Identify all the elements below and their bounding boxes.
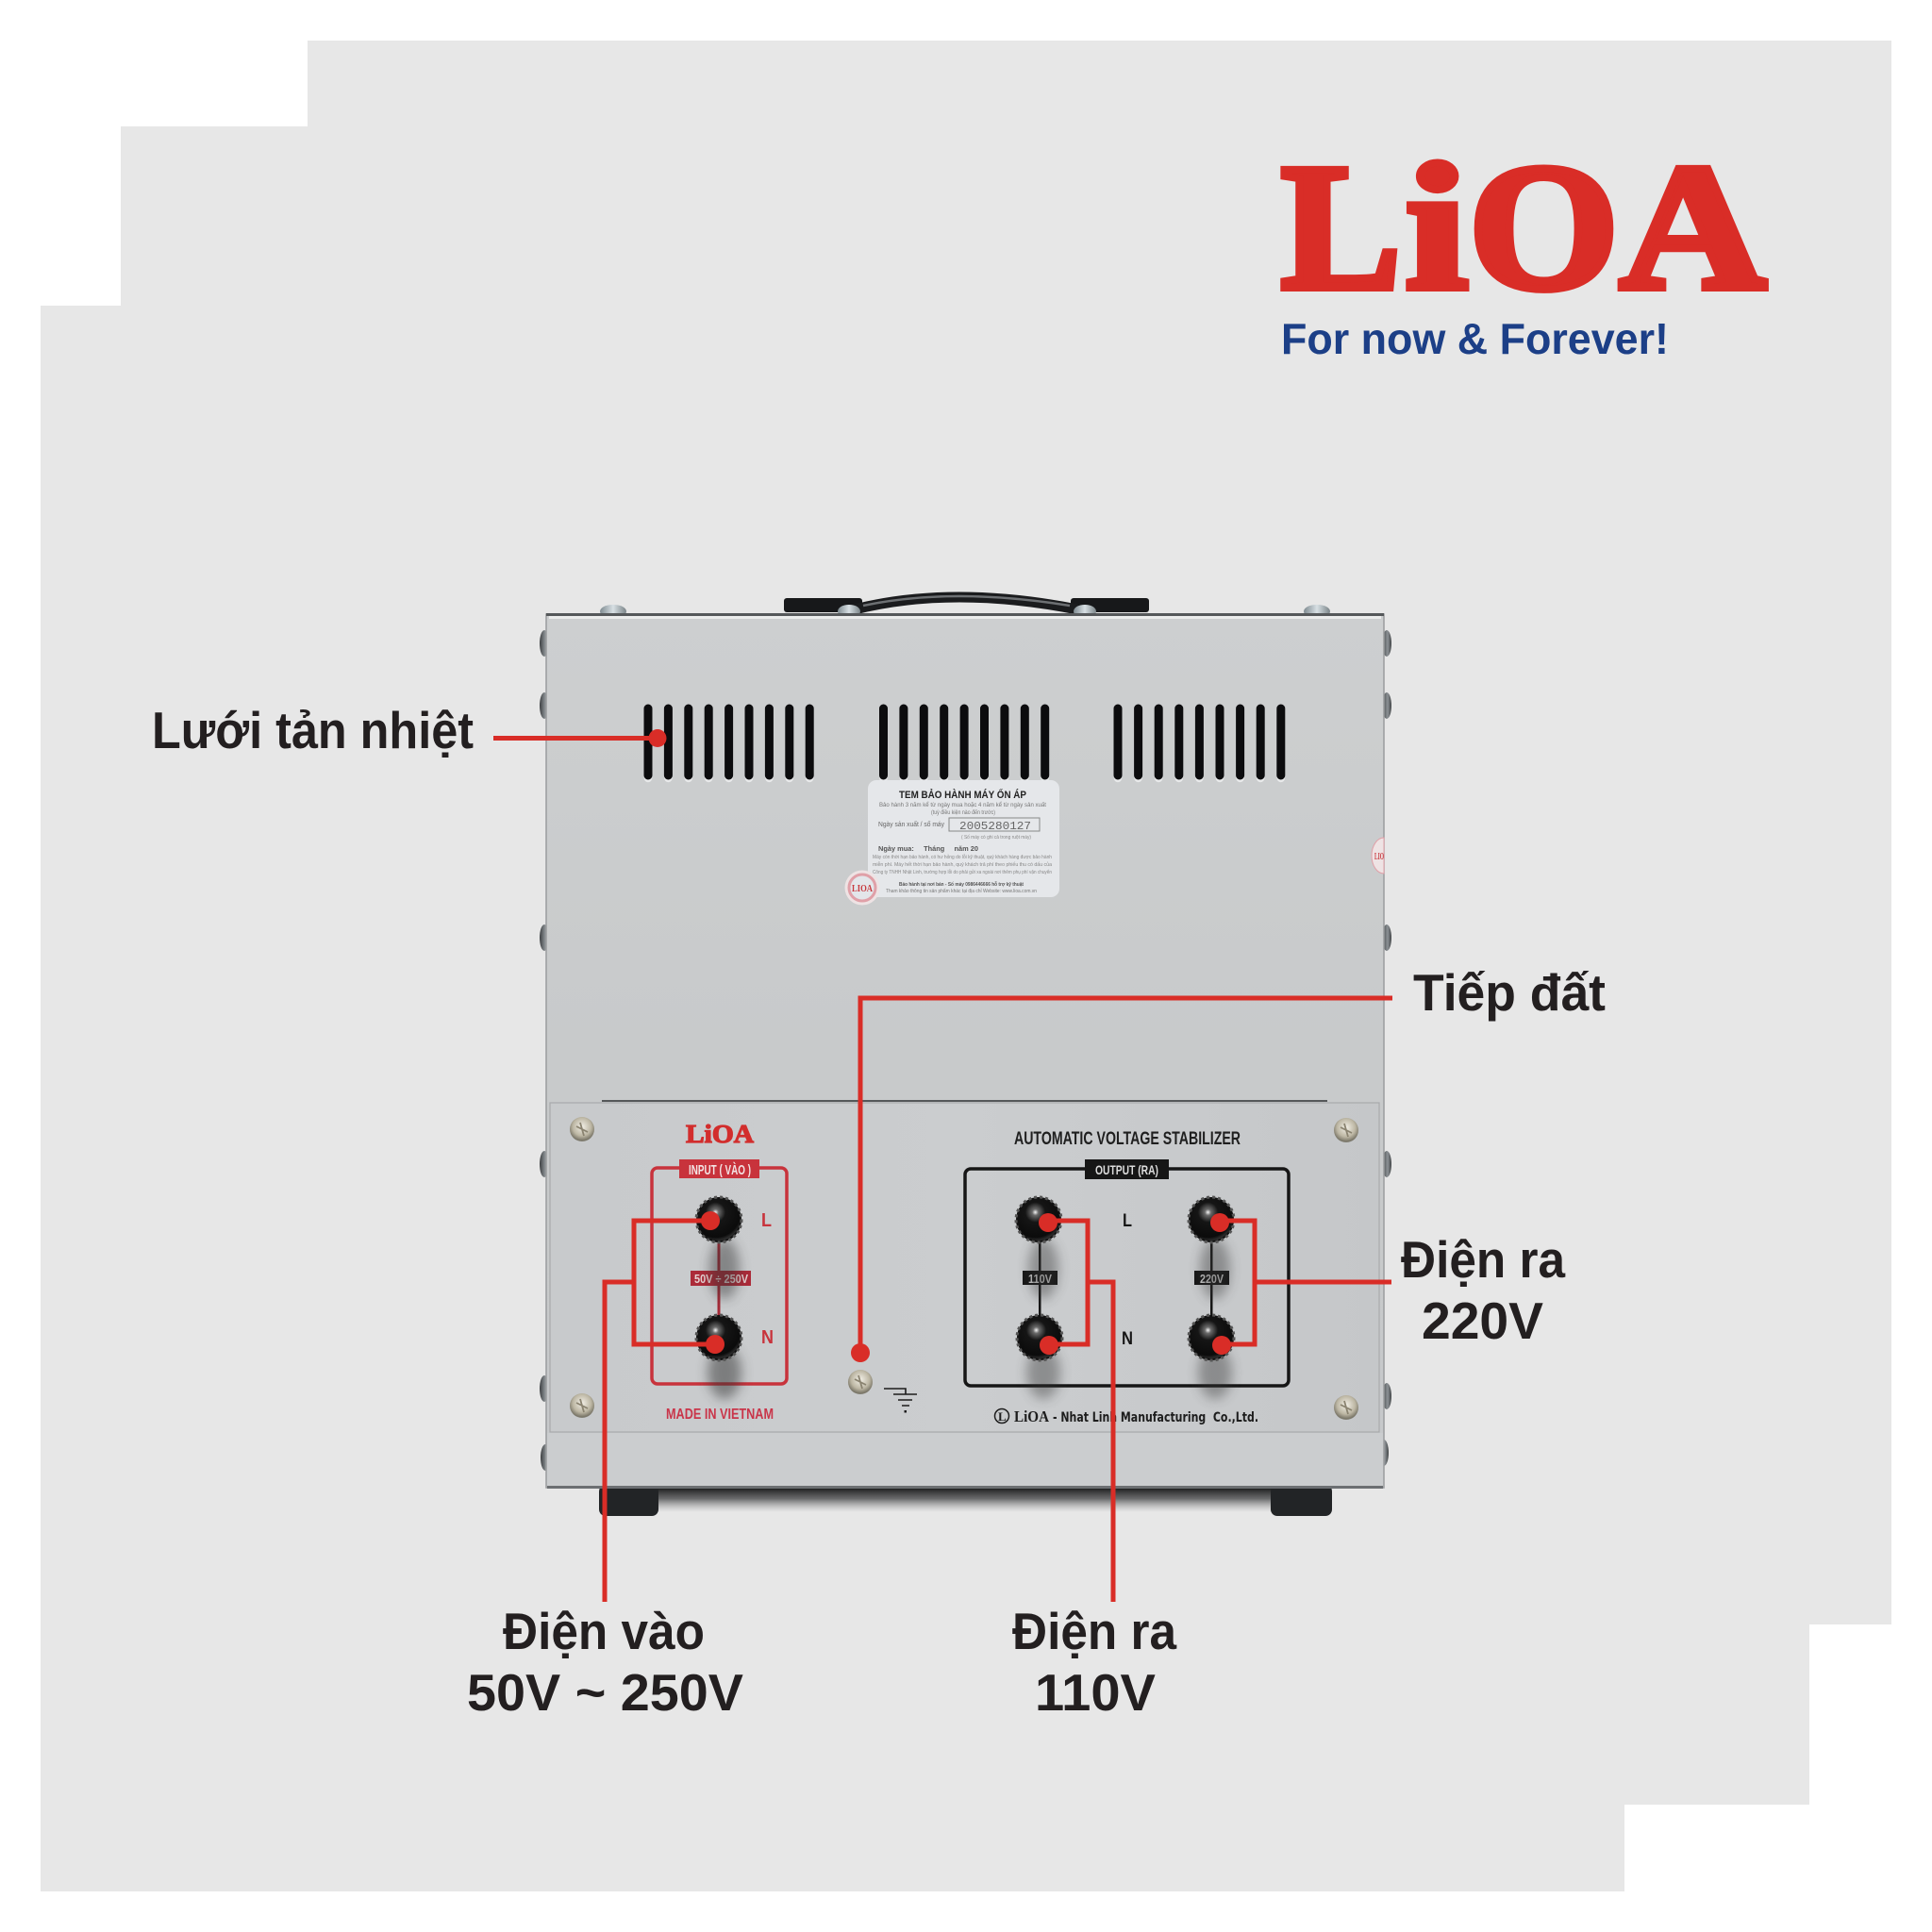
hologram seal on sticker: LIOA: [852, 884, 874, 894]
callout: 110V leader: [1039, 1213, 1113, 1602]
manufacturer line: - Nhat Linh Manufacturing Co.,Ltd.: [1053, 1410, 1258, 1425]
output knobs: [1016, 1197, 1234, 1399]
front panel slit: [602, 1100, 1327, 1105]
hologram seal on side: LIO: [1374, 852, 1384, 862]
front panel: [550, 1103, 1379, 1432]
voltage stabilizer device: [152, 596, 1606, 1722]
label: input voltage: [467, 1602, 743, 1722]
logo tagline: For now & Forever!: [1281, 314, 1669, 363]
callout: ground leader: [851, 998, 1392, 1362]
input L N labels: [761, 1210, 774, 1348]
output L N labels: L: [1123, 1211, 1132, 1231]
warranty sticker: Ngày sản xuất / số máy: [878, 820, 944, 828]
warranty sticker: Bảo hành tại nơi bán - Số máy 0986446666 hỗ trợ kỹ thuật: [899, 881, 1024, 888]
ventilation slots right: [1118, 708, 1281, 778]
output label: OUTPUT (RA): [1095, 1162, 1158, 1177]
logo wordmark: i: [1406, 128, 1468, 327]
device feet and shadow: [599, 1485, 1332, 1516]
label: ground: Tiếp đất: [1413, 963, 1606, 1022]
110V label: 110V: [1028, 1272, 1052, 1286]
output section: [965, 1129, 1289, 1425]
hologram seal on sticker: [845, 870, 879, 906]
input L N labels: L: [761, 1210, 772, 1231]
label: output 220V: 220V: [1422, 1291, 1543, 1350]
input range label: 50V ÷ 250V: [694, 1272, 748, 1286]
side bolts: [540, 630, 1391, 1471]
top bolts: [600, 605, 1330, 618]
output L N labels: N: [1122, 1329, 1133, 1349]
made in vietnam: MADE IN VIETNAM: [666, 1407, 774, 1423]
carry handle: [784, 596, 1149, 612]
small LiOA logo: LiOA: [686, 1120, 755, 1148]
warranty sticker: Bảo hành 3 năm kể từ ngày mua hoặc 4 năm kể từ ngày sản xuất: [879, 800, 1046, 808]
ventilation slots left: [648, 708, 809, 778]
callout: input leader: [605, 1211, 724, 1602]
manufacturer line: L: [998, 1409, 1007, 1424]
warranty sticker: Tham khảo thông tin sản phẩm khác tại địa chỉ Website: www.lioa.com.vn: [886, 888, 1037, 894]
lower band: [547, 1433, 1383, 1489]
output links: [1039, 1226, 1213, 1330]
input label: [679, 1159, 759, 1178]
ventilation slots center: [883, 708, 1045, 778]
output frame: [965, 1169, 1289, 1386]
warranty sticker: 2005280127: [959, 820, 1031, 833]
label: input voltage: 50V ~ 250V: [467, 1663, 743, 1722]
220V label: 220V: [1200, 1272, 1224, 1286]
product title: AUTOMATIC VOLTAGE STABILIZER: [1014, 1129, 1241, 1149]
manufacturer line: [994, 1407, 1258, 1425]
input frame: [652, 1168, 787, 1384]
input knobs: [696, 1197, 741, 1399]
input L N labels: N: [761, 1327, 774, 1348]
logo wordmark: A: [1620, 128, 1766, 327]
input section: [652, 1120, 787, 1423]
label: input voltage: Điện vào: [503, 1602, 705, 1660]
manufacturer line: LiOA: [1014, 1407, 1050, 1425]
label: output 110V: 110V: [1035, 1663, 1156, 1722]
input terminal link: [717, 1226, 721, 1330]
device body: [546, 614, 1384, 1488]
label: output 110V: [1012, 1602, 1176, 1722]
logo wordmark: L: [1281, 128, 1401, 327]
logo wordmark: O: [1469, 128, 1619, 327]
hologram seal on side: [1372, 838, 1384, 874]
panel screws: [570, 1117, 1358, 1420]
warranty sticker: (tuỳ điều kiện nào đến trước): [931, 808, 995, 816]
callout: heat vent leader: [493, 729, 666, 747]
warranty sticker: Công ty TNHH Nhật Linh, trường hợp lỗi do phải gửi xa ngoài nơi thêm phụ phí vận chuyển: [873, 869, 1052, 875]
warranty sticker: miễn phí. Máy hết thời hạn bảo hành, quý khách trả phí theo phiếu thu có dấu của: [873, 861, 1052, 868]
warranty sticker: [868, 780, 1059, 897]
output L N labels: [1122, 1211, 1133, 1349]
ground terminal: [848, 1370, 917, 1413]
LiOA logo: [1281, 128, 1766, 363]
warranty sticker: TEM BẢO HÀNH MÁY ỔN ÁP: [899, 789, 1026, 801]
input label: INPUT ( VÀO ): [689, 1162, 751, 1178]
output label: [1085, 1159, 1169, 1179]
label: output 220V: Điện ra: [1401, 1230, 1565, 1289]
label: output 220V: [1401, 1230, 1565, 1350]
logo wordmark: [1281, 128, 1766, 327]
warranty sticker: Máy còn thời hạn bảo hành, có hư hỏng do lỗi kỹ thuật, quý khách hàng được bảo hành: [873, 854, 1052, 860]
callout: 220V leader: [1210, 1213, 1391, 1355]
label: heat vent: Lưới tản nhiệt: [152, 701, 474, 759]
warranty sticker: ( Số máy có ghi cả trong ruột máy): [961, 835, 1031, 841]
label: output 110V: Điện ra: [1012, 1602, 1176, 1660]
warranty sticker: Ngày mua: Tháng năm 20: [878, 846, 978, 853]
